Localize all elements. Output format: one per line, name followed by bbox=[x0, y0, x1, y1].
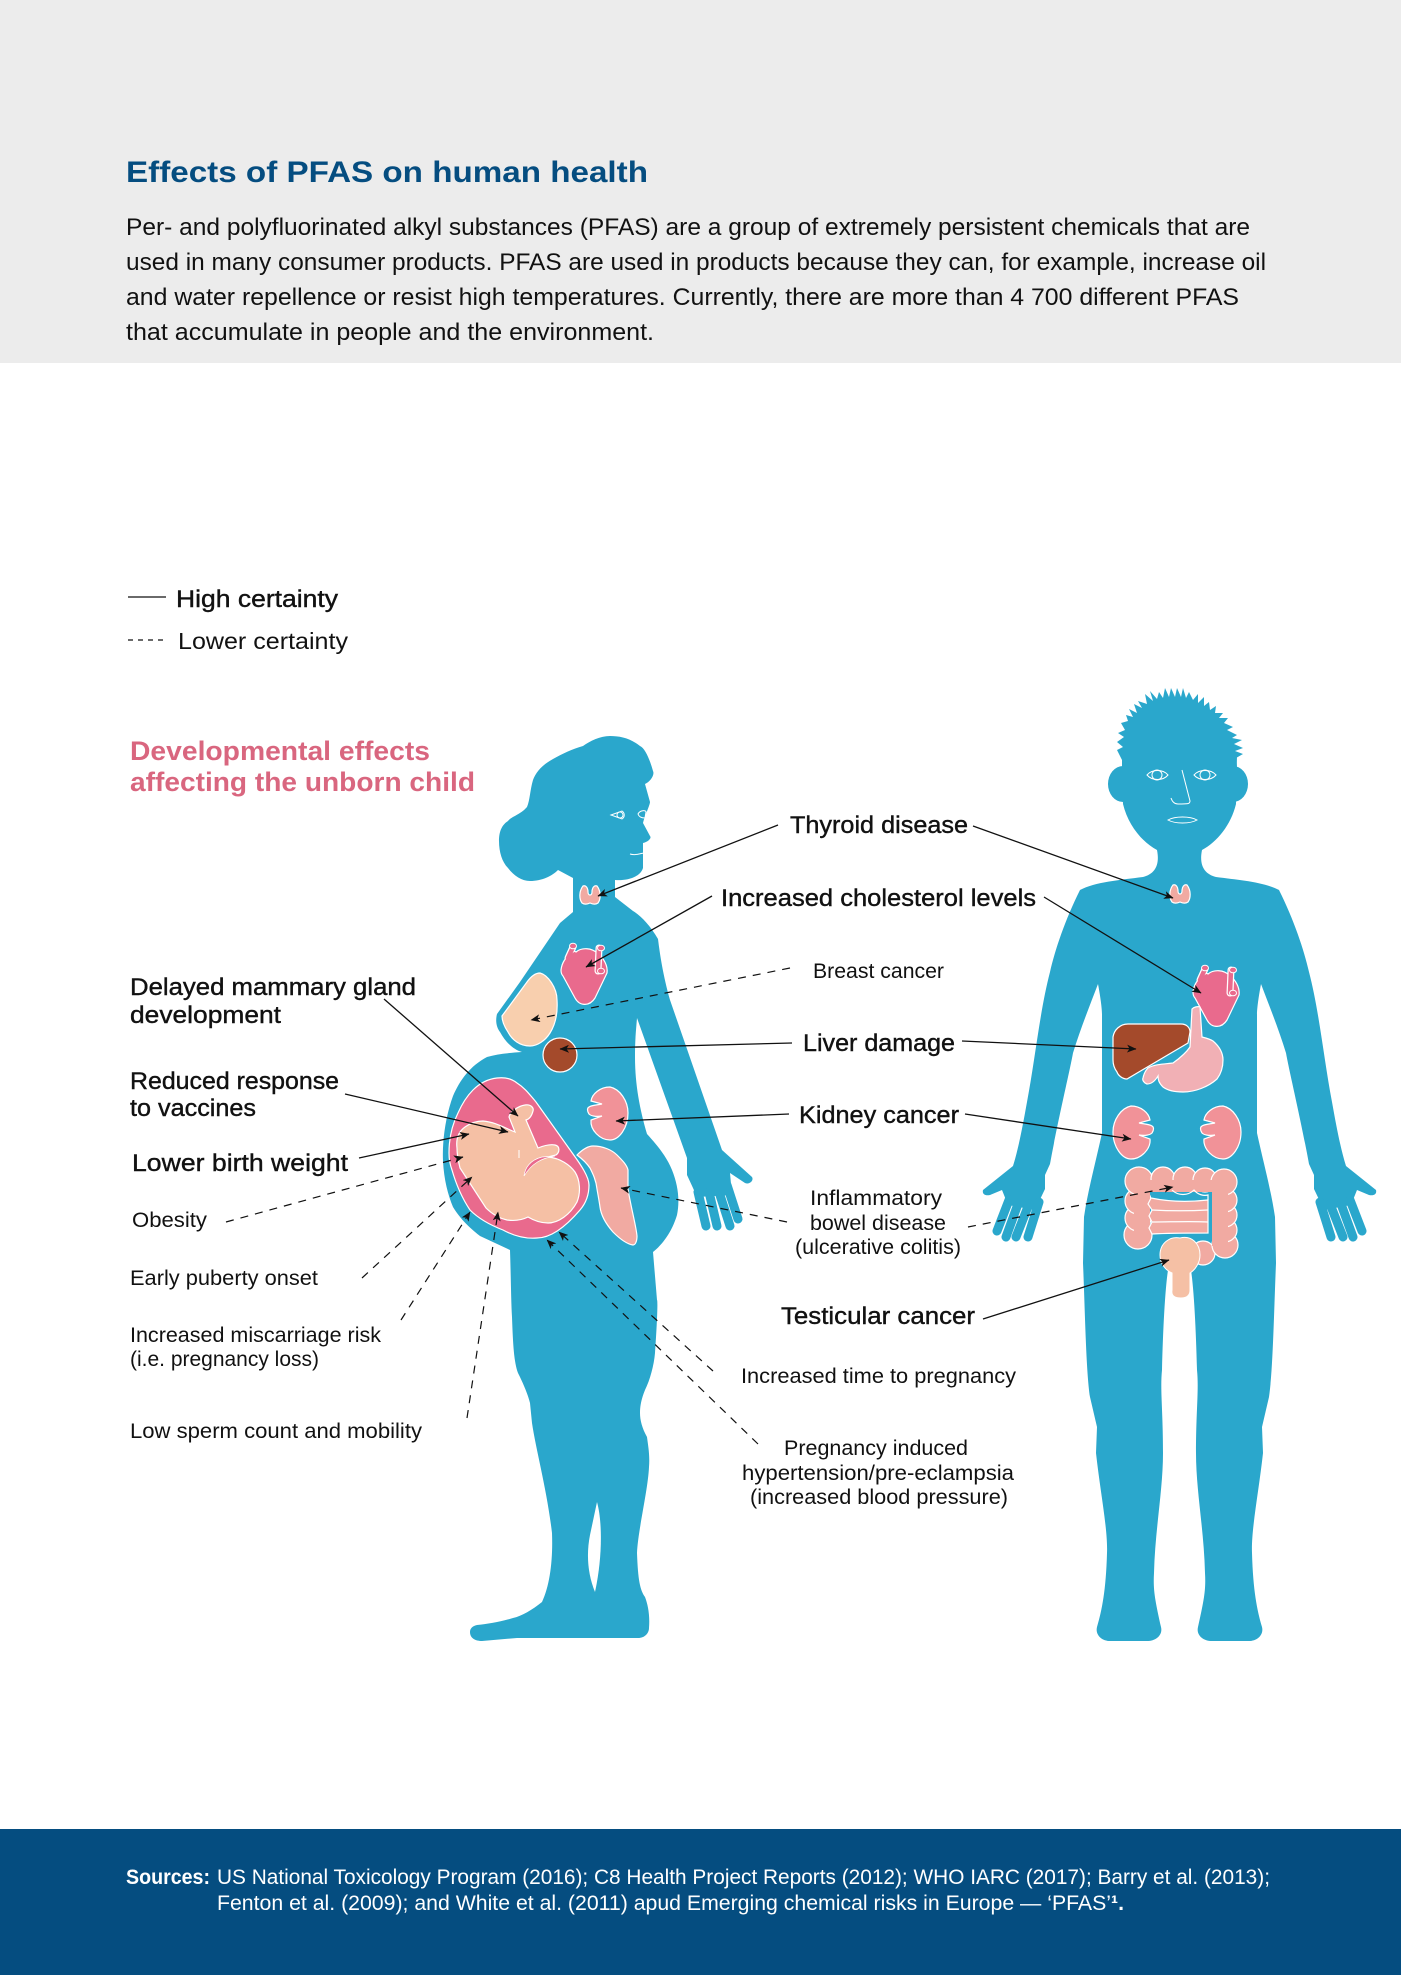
label: testicular cancer: Testicular cancer bbox=[781, 1303, 975, 1330]
heart bbox=[1193, 965, 1239, 1026]
label: liver damage: Liver damage bbox=[803, 1030, 955, 1057]
label: pregnancy induced hypertension: hypertension/pre-eclampsia bbox=[742, 1462, 1014, 1485]
label: increased miscarriage risk bbox=[130, 1324, 381, 1371]
label: increased cholesterol levels: Increased cholesterol levels bbox=[721, 885, 1036, 912]
label: delayed mammary gland development: Delayed mammary gland bbox=[130, 974, 416, 1001]
thyroid bbox=[1170, 885, 1190, 903]
label: increased time to pregnancy: Increased time to pregnancy bbox=[741, 1365, 1017, 1388]
label: increased miscarriage risk: (i.e. pregnancy loss) bbox=[130, 1348, 319, 1371]
face details bbox=[611, 811, 646, 855]
label: delayed mammary gland development: development bbox=[130, 1002, 281, 1029]
liver bbox=[1113, 1024, 1190, 1079]
label: inflammatory bowel disease: (ulcerative colitis) bbox=[795, 1236, 961, 1259]
label: inflammatory bowel disease bbox=[795, 1187, 961, 1259]
sources: Fenton et al. (2009); and White et al. (2011) apud Emerging chemical risks in Europe — ‘PFAS’ ¹. bbox=[217, 1892, 1124, 1915]
label: increased miscarriage risk: Increased miscarriage risk bbox=[130, 1324, 381, 1347]
legend: High certainty bbox=[176, 586, 338, 613]
label: inflammatory bowel disease: Inflammatory bbox=[810, 1187, 943, 1210]
intro text: used in many consumer products. PFAS are used in products because they can, for example, increase oil bbox=[126, 249, 1266, 276]
sources: Sources: bbox=[126, 1866, 210, 1889]
figure: pregnant woman bbox=[443, 736, 753, 1641]
label: pregnancy induced hypertension: Pregnancy induced bbox=[784, 1437, 968, 1460]
legend: Lower certainty bbox=[178, 628, 349, 654]
spiky hair bbox=[1117, 688, 1243, 767]
legend bbox=[128, 586, 349, 654]
label: reduced response to vaccines: to vaccines bbox=[130, 1095, 256, 1122]
label: obesity: Obesity bbox=[132, 1209, 208, 1232]
label: early puberty onset: Early puberty onset bbox=[130, 1267, 318, 1290]
label: breast cancer: Breast cancer bbox=[813, 960, 944, 983]
lower certainty arrows bbox=[226, 968, 1173, 1444]
breast bbox=[502, 973, 557, 1046]
kidneys bbox=[1113, 1106, 1241, 1159]
sources: US National Toxicology Program (2016); C8 Health Project Reports (2012); WHO IARC (2017); Barry et al. (2013); bbox=[217, 1866, 1270, 1889]
intestine bbox=[577, 1146, 637, 1245]
label: thyroid disease: Thyroid disease bbox=[790, 812, 968, 839]
label: lower birth weight: Lower birth weight bbox=[132, 1150, 348, 1177]
intro text bbox=[126, 214, 1266, 346]
man silhouette bbox=[983, 688, 1376, 1641]
label: low sperm count and mobility: Low sperm count and mobility bbox=[130, 1420, 423, 1443]
liver bbox=[543, 1038, 577, 1072]
label: kidney cancer: Kidney cancer bbox=[799, 1102, 959, 1129]
testicle bbox=[1160, 1237, 1200, 1298]
labels: shared effects, centre column bbox=[721, 812, 1036, 1509]
fetus bbox=[457, 1105, 579, 1223]
womb bbox=[449, 1078, 589, 1238]
stomach bbox=[1143, 1007, 1223, 1092]
header panel bbox=[0, 0, 1401, 363]
heading: developmental effects bbox=[130, 736, 475, 797]
figure: man bbox=[983, 688, 1376, 1641]
sources bbox=[126, 1866, 1270, 1915]
intro text: and water repellence or resist high temperatures. Currently, there are more than 4 700 different PFAS bbox=[126, 284, 1239, 311]
woman silhouette bbox=[443, 736, 753, 1641]
label: delayed mammary gland development bbox=[130, 974, 416, 1029]
heading: developmental effects: Developmental effects bbox=[130, 736, 430, 766]
label: pregnancy induced hypertension bbox=[742, 1437, 1014, 1509]
label: reduced response to vaccines bbox=[130, 1068, 339, 1122]
intestines bbox=[1124, 1167, 1238, 1265]
heart bbox=[561, 943, 607, 1004]
labels: developmental effects, left column bbox=[130, 974, 423, 1443]
label: pregnancy induced hypertension: (increased blood pressure) bbox=[750, 1486, 1008, 1509]
high certainty arrows bbox=[345, 825, 1201, 1319]
heading: developmental effects: affecting the unborn child bbox=[130, 767, 475, 797]
intro text: that accumulate in people and the environment. bbox=[126, 319, 654, 346]
gap between legs bbox=[588, 1502, 601, 1592]
thyroid bbox=[580, 886, 600, 904]
title: Effects of PFAS on human health bbox=[126, 156, 648, 189]
intro text: Per- and polyfluorinated alkyl substances (PFAS) are a group of extremely persistent chemicals that are bbox=[126, 214, 1250, 241]
label: inflammatory bowel disease: bowel disease bbox=[810, 1212, 946, 1235]
label: reduced response to vaccines: Reduced response bbox=[130, 1068, 339, 1095]
footer panel bbox=[0, 1829, 1401, 1975]
kidney bbox=[588, 1087, 628, 1140]
face details bbox=[1147, 770, 1216, 823]
